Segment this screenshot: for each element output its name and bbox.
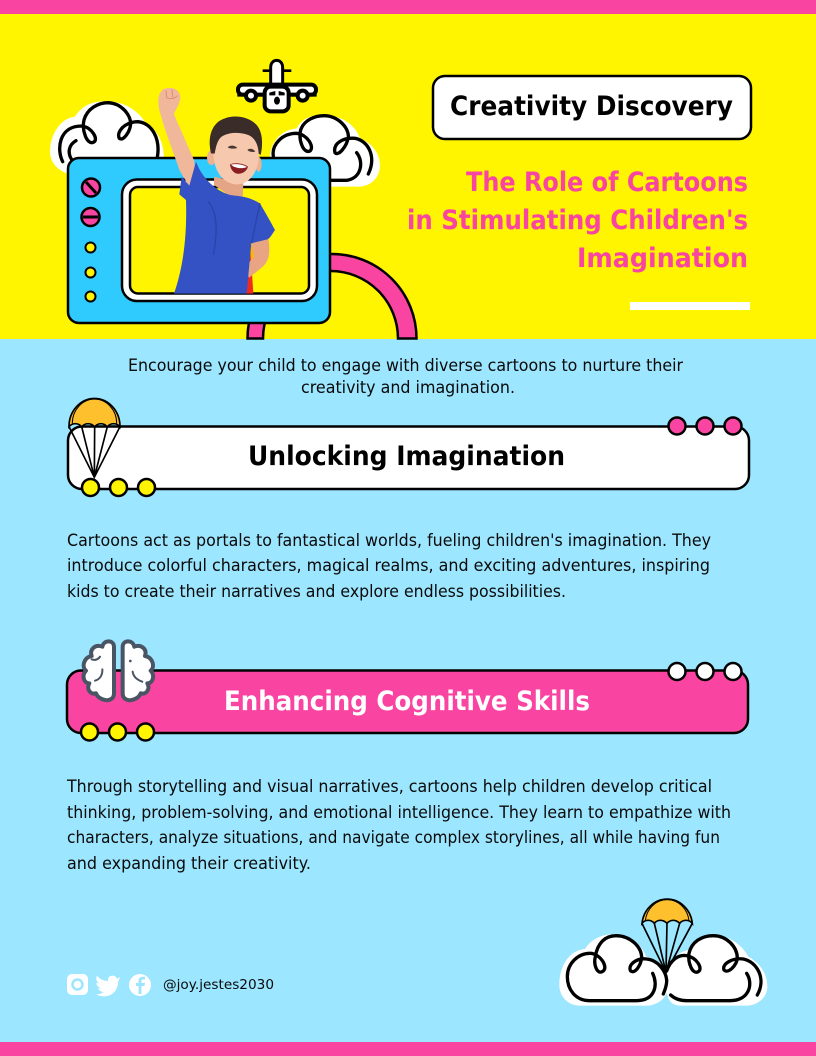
icon: facebook xyxy=(129,974,151,996)
TV button one xyxy=(86,242,96,252)
bottom pink band xyxy=(0,1042,816,1056)
text block: cognitive: and expanding their creativity. xyxy=(67,854,311,873)
yellow dots xyxy=(82,479,155,496)
yellow dots xyxy=(81,724,154,740)
text block: imagination: Cartoons act as portals to fantastical worlds, fueling children's imagination. They xyxy=(67,531,711,550)
text block: imagination xyxy=(67,531,711,601)
TV dial two xyxy=(82,208,100,226)
text block: cognitive: thinking, problem-solving, and emotional intelligence. They learn to empathize with xyxy=(67,803,731,822)
TV button two xyxy=(86,268,96,278)
intro text: creativity and imagination. xyxy=(301,378,515,397)
icon: parachute xyxy=(642,899,692,972)
heading: Enhancing Cognitive Skills xyxy=(224,686,590,717)
illustration: pink arch xyxy=(248,254,416,338)
icon: cloud top right xyxy=(270,115,380,187)
social handle: @joy.jestes2030 xyxy=(163,977,274,993)
pink dots xyxy=(668,418,742,434)
social icons xyxy=(67,974,151,996)
icon: twitter xyxy=(96,976,120,996)
text block: imagination: introduce colorful characters, magical realms, and exciting adventures, inspiring xyxy=(67,556,710,575)
title badge xyxy=(433,76,751,139)
TV screen xyxy=(122,180,317,301)
header yellow panel xyxy=(0,14,816,339)
intro text: Encourage your child to engage with diverse cartoons to nurture their xyxy=(128,356,683,375)
TV button three xyxy=(86,292,96,302)
subtitle: in Stimulating Children's xyxy=(407,205,748,236)
icon: parachute xyxy=(69,398,120,477)
icon: airplane xyxy=(237,60,317,111)
white accent bar xyxy=(630,302,750,310)
icon: left cloud xyxy=(559,934,668,1006)
title: Creativity Discovery xyxy=(450,91,733,122)
panel: cognitive skills banner xyxy=(67,641,748,740)
panel: unlocking imagination banner xyxy=(68,398,749,496)
subtitle: Imagination xyxy=(577,243,748,274)
white dots xyxy=(668,663,742,680)
top pink band xyxy=(0,0,816,14)
text block: cognitive xyxy=(66,777,731,873)
illustration: TV frame xyxy=(68,158,330,323)
heading: Unlocking Imagination xyxy=(248,441,565,472)
TV dial one xyxy=(82,178,100,196)
intro text xyxy=(128,356,683,397)
text block: cognitive: Through storytelling and visual narratives, cartoons help children develop critical xyxy=(66,777,712,796)
text block: imagination: kids to create their narratives and explore endless possibilities. xyxy=(67,582,566,601)
subtitle: The Role of Cartoons xyxy=(466,167,748,198)
illustration: boy in blue shirt xyxy=(158,88,275,294)
icon: instagram xyxy=(67,974,88,995)
text block: cognitive: characters, analyze situations, and navigate complex storylines, all while having fun xyxy=(67,828,720,847)
subtitle xyxy=(407,167,748,274)
icon: right cloud xyxy=(666,935,767,1006)
icon: brain xyxy=(84,641,153,700)
illustration: clouds with parachute xyxy=(559,899,767,1006)
icon: cloud top left xyxy=(50,101,164,174)
